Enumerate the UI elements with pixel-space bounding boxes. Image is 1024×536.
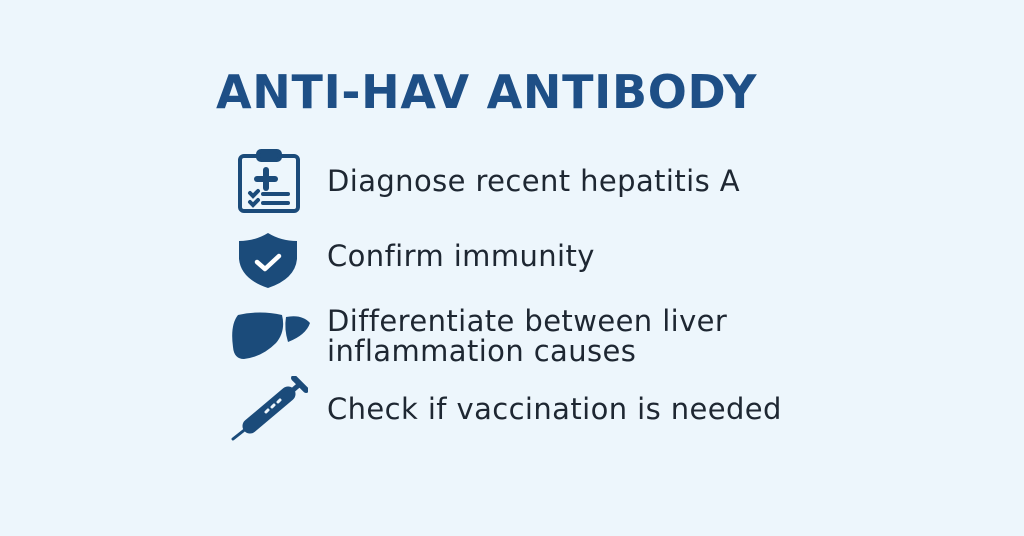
title: ANTI-HAV ANTIBODY (216, 65, 757, 119)
icon: clipboard (238, 149, 300, 213)
item 4: Check if vaccination is needed (327, 392, 782, 426)
item 3 (327, 304, 727, 368)
icon: shield (239, 233, 297, 288)
icon: syringe (231, 376, 308, 441)
item 3: Differentiate between liver (327, 304, 727, 338)
icon: liver (232, 312, 310, 359)
item 1: Diagnose recent hepatitis A (327, 164, 740, 198)
item 2: Confirm immunity (327, 239, 595, 273)
item 3: inflammation causes (327, 334, 636, 368)
